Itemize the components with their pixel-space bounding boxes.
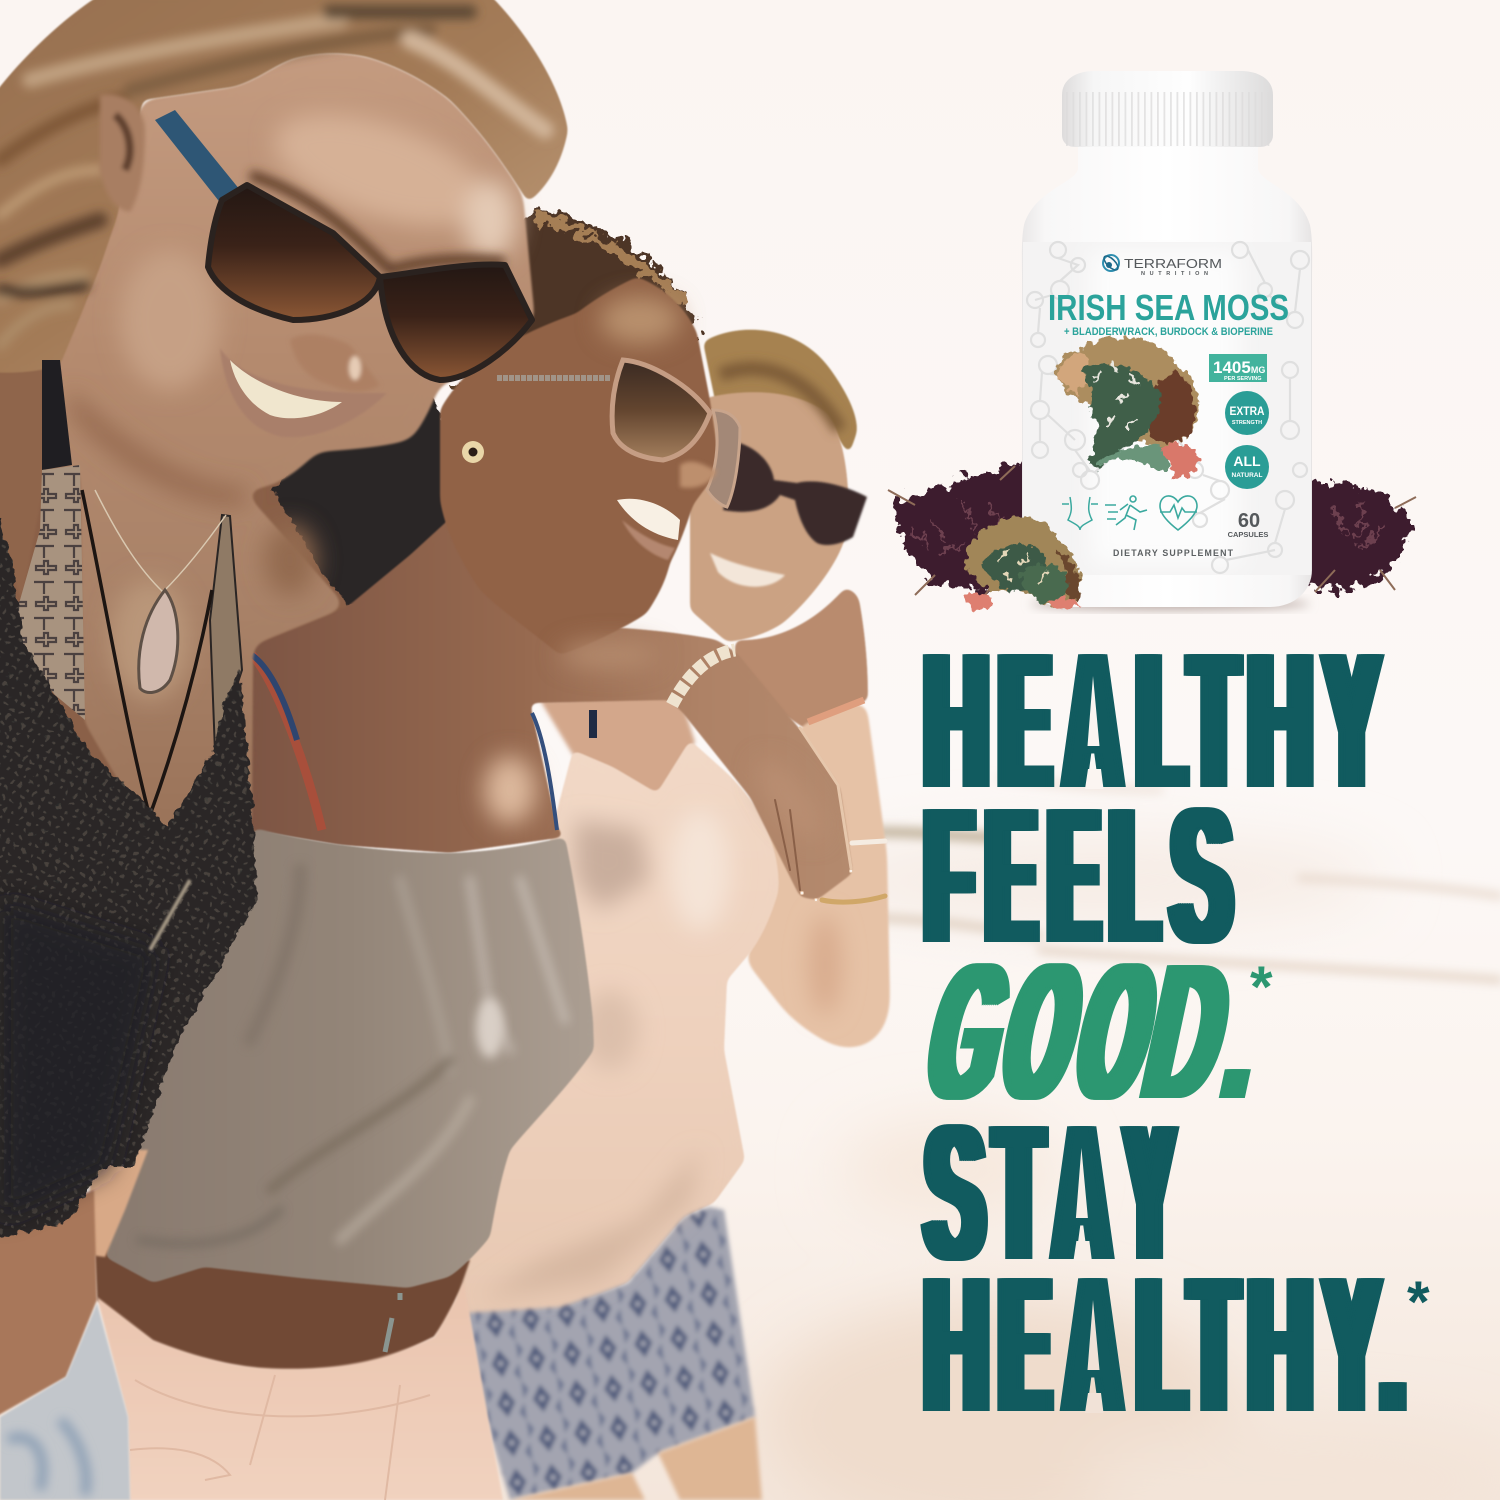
jeans shorts <box>0 1303 130 1500</box>
back woman hand <box>735 588 868 730</box>
back woman forearm <box>745 700 890 1048</box>
midriff <box>94 1240 470 1371</box>
headline line: HEALTHY.: . <box>1382 1236 1403 1452</box>
brand logo <box>1102 254 1222 277</box>
front woman skin <box>42 53 535 835</box>
headline line: HEALTHY.: H <box>1248 1236 1313 1452</box>
headline line: HEALTHY: H <box>1248 612 1313 828</box>
woman in the middle <box>0 211 853 1500</box>
black strap <box>42 360 72 470</box>
face shading <box>70 92 516 700</box>
extra strength badge <box>1225 391 1269 435</box>
back woman hair shading <box>720 369 840 430</box>
all natural badge: ALL <box>1233 453 1261 469</box>
icon: heart <box>1160 496 1197 530</box>
headline line: HEALTHY: A <box>1066 612 1120 828</box>
neck and chest <box>540 695 695 800</box>
seaweed twigs right <box>1315 497 1416 592</box>
headline line: HEALTHY: L <box>1138 612 1184 828</box>
nose <box>290 335 380 391</box>
headline line: GOOD. <box>913 923 1279 1139</box>
woman at front <box>0 0 568 1500</box>
headline line: FEELS: L <box>1111 767 1157 983</box>
headline line: HEALTHY.: L <box>1138 1236 1184 1452</box>
necklace with pendant <box>82 490 226 815</box>
bottle body <box>1022 145 1312 607</box>
headline line: GOOD.: O <box>1062 923 1171 1139</box>
product title: IRISH SEA MOSS <box>1048 287 1289 328</box>
gray top <box>105 828 594 1288</box>
asterisk after HEALTHY: * <box>1407 1270 1430 1335</box>
all natural badge: NATURAL <box>1232 472 1262 479</box>
shorts details <box>130 1375 430 1500</box>
hair <box>0 0 568 373</box>
cap <box>1062 71 1273 147</box>
headline line: GOOD.: O <box>988 923 1097 1139</box>
headline line: STAY: Y <box>1127 1084 1172 1300</box>
headline line: HEALTHY.: H <box>924 1236 989 1452</box>
extra strength badge: STRENGTH <box>1232 420 1262 426</box>
hair strands <box>0 12 545 345</box>
seaweed clump left <box>888 462 1030 595</box>
headline line: HEALTHY.: E <box>1001 1236 1049 1452</box>
brand logo: NUTRITION <box>1141 271 1208 277</box>
1405mg badge: 1405MG <box>1213 358 1265 377</box>
hand bracelet <box>808 700 864 722</box>
underlay behind women <box>0 360 470 840</box>
headline line: GOOD.: . <box>1212 923 1279 1139</box>
asterisk after GOOD: * <box>1250 955 1273 1020</box>
legs <box>510 1417 762 1500</box>
seaweed clump right <box>1305 483 1416 592</box>
gray top folds <box>140 870 565 1244</box>
woman at back <box>450 330 890 1500</box>
all natural badge <box>1225 445 1269 489</box>
headline <box>913 612 1430 1452</box>
extra strength badge: EXTRA <box>1230 404 1265 418</box>
back woman sunglasses <box>723 443 867 545</box>
dietary supplement: DIETARY SUPPLEMENT <box>1113 548 1234 558</box>
shell bracelet <box>672 650 735 705</box>
icon: waist <box>1062 497 1098 530</box>
headline line: FEELS: S <box>1171 767 1232 983</box>
headline line: HEALTHY: Y <box>1325 612 1378 828</box>
60 capsules: CAPSULES <box>1228 530 1268 539</box>
back woman face <box>690 392 848 642</box>
headline line: STAY <box>920 1084 1180 1300</box>
top lit patch <box>476 998 504 1058</box>
patterned top <box>0 465 85 720</box>
middle woman smile <box>617 499 680 560</box>
headline line: HEALTHY. <box>922 1236 1407 1452</box>
front woman shoulder and waist skin <box>0 360 97 1420</box>
back woman hair <box>703 330 857 455</box>
60 capsules <box>1228 510 1268 539</box>
strap <box>252 655 557 830</box>
tee strap <box>589 710 597 738</box>
dark back hair <box>273 390 480 607</box>
headline line: HEALTHY.: T <box>1191 1236 1237 1452</box>
arm bangles <box>822 841 885 902</box>
headline line: HEALTHY: T <box>1191 612 1237 828</box>
peach tee <box>450 740 779 1318</box>
front woman smile <box>220 348 387 437</box>
ingredients subtitle: + BLADDERWRACK, BURDOCK & BIOPERINE <box>1064 326 1273 338</box>
headline line: FEELS: E <box>1050 767 1097 983</box>
headline line: HEALTHY.: A <box>1066 1236 1120 1452</box>
crochet shading <box>0 900 160 1220</box>
belly piercing <box>385 1293 400 1352</box>
bottle <box>1022 71 1312 610</box>
60 capsules: 60 <box>1238 510 1260 532</box>
patterned strap <box>210 515 242 752</box>
finger highlights and nails <box>775 728 852 902</box>
seaweed twigs <box>888 466 1015 595</box>
seaweed front <box>965 517 1080 610</box>
tee shading <box>480 810 841 1300</box>
headline line: STAY: T <box>996 1084 1041 1300</box>
headline line: HEALTHY.: Y <box>1325 1236 1378 1452</box>
crochet highlight <box>150 880 190 950</box>
icon: runner <box>1105 496 1147 530</box>
1405mg badge <box>1209 354 1267 382</box>
headline line: GOOD.: D <box>1130 923 1246 1139</box>
headline line: STAY: A <box>1055 1084 1108 1300</box>
headline line: FEELS <box>922 767 1236 983</box>
headline line: HEALTHY: E <box>1001 612 1049 828</box>
brand logo: TERRAFORM <box>1124 256 1222 271</box>
1405mg badge: PER SERVING <box>1224 376 1262 382</box>
headline line: FEELS: F <box>926 767 972 983</box>
front woman hand <box>90 1150 148 1257</box>
headline line: STAY: S <box>925 1084 985 1300</box>
earring <box>462 441 484 463</box>
eyebrow shadow <box>250 175 505 270</box>
middle woman curly hair <box>450 211 698 440</box>
curls below the temple <box>450 385 515 440</box>
bottle shadow <box>1030 598 1310 610</box>
patterned shorts <box>467 1207 755 1500</box>
front woman sunglasses <box>155 110 532 380</box>
bottle neck shading <box>1078 164 1258 166</box>
label background <box>1023 242 1311 575</box>
headline line: HEALTHY <box>922 612 1385 828</box>
middle woman sunglasses <box>497 360 740 507</box>
middle woman body and arm <box>250 500 853 900</box>
black crochet top <box>0 510 257 1240</box>
molecule pattern <box>1027 242 1309 573</box>
headline line: FEELS: E <box>988 767 1034 983</box>
headline line: HEALTHY: H <box>924 612 989 828</box>
middle woman face <box>440 277 720 655</box>
ear <box>100 94 145 212</box>
seaweed illustration on label <box>1056 337 1198 479</box>
peach shorts <box>97 1283 503 1500</box>
skin highlights <box>484 296 834 849</box>
middle woman nose <box>680 462 717 488</box>
back woman smile <box>710 553 785 587</box>
headline line: GOOD.: G <box>913 923 1024 1139</box>
